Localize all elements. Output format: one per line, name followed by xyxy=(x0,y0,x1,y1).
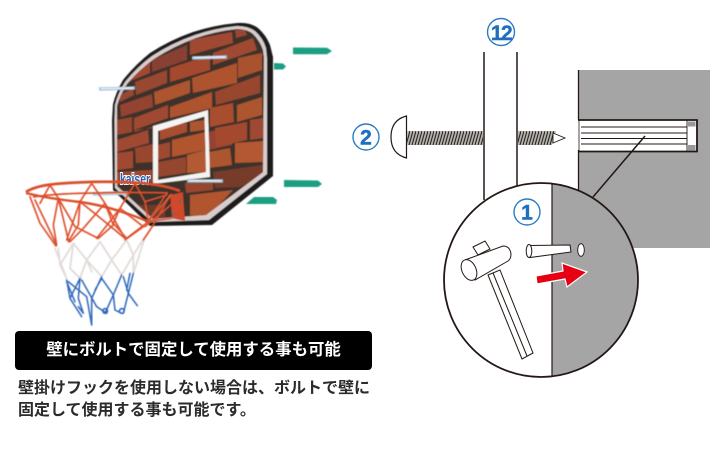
heading banner: 壁にボルトで固定して使用する事も可能 xyxy=(46,341,341,359)
rim and bracket xyxy=(26,182,185,222)
post lines xyxy=(484,52,517,200)
net red section xyxy=(30,183,177,246)
wall block xyxy=(578,70,710,248)
label 12 xyxy=(488,18,514,46)
rim xyxy=(26,182,180,192)
detail circle xyxy=(444,136,645,380)
bracket xyxy=(170,192,185,221)
wall anchors green xyxy=(246,48,332,204)
label 1 xyxy=(514,199,540,225)
label 1: 1 xyxy=(521,202,533,224)
brand logo: kaiser xyxy=(120,171,150,188)
label 2 xyxy=(353,124,379,150)
hammer xyxy=(458,241,533,359)
brick texture xyxy=(116,28,264,220)
label 2: 2 xyxy=(360,126,372,150)
backboard square xyxy=(153,110,210,184)
net blue section xyxy=(67,273,137,325)
red arrow xyxy=(536,263,587,287)
backboard xyxy=(110,20,275,226)
wall plug xyxy=(578,120,697,152)
heading banner xyxy=(15,331,372,370)
bolts xyxy=(93,57,227,194)
description text: 固定して使用する事も可能です。 xyxy=(18,402,256,419)
leader line xyxy=(593,136,645,197)
description text xyxy=(18,379,370,419)
net white section xyxy=(55,237,145,278)
illustration canvas xyxy=(24,18,710,378)
screw xyxy=(391,116,565,158)
peg xyxy=(526,244,571,258)
hole xyxy=(578,244,584,256)
label 12: 12 xyxy=(491,22,512,45)
net xyxy=(30,183,177,325)
wall edge xyxy=(578,70,580,200)
description text: 壁掛けフックを使用しない場合は、ボルトで壁に xyxy=(18,380,370,397)
